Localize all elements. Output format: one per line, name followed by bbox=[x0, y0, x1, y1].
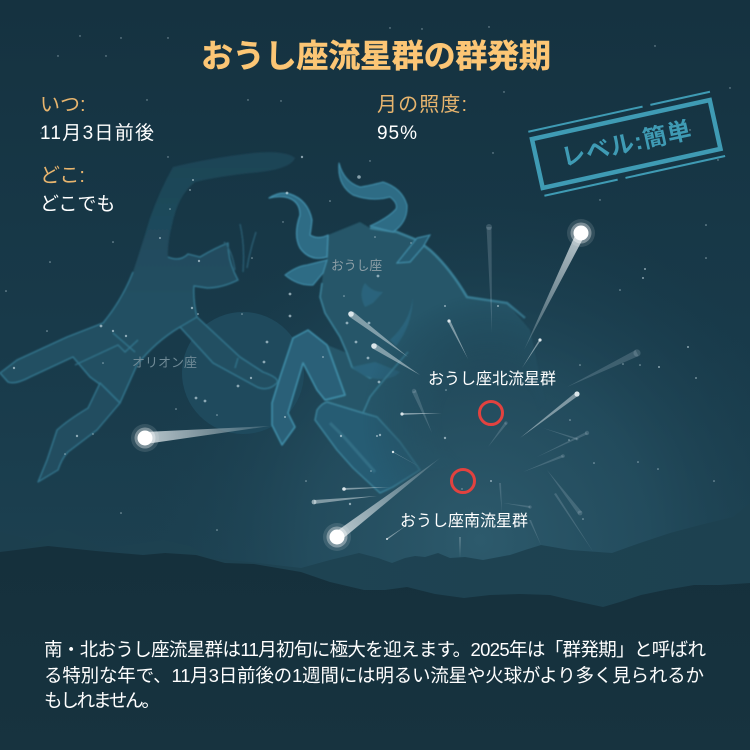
radiant marker: north bbox=[480, 402, 502, 424]
big meteor: upper right bbox=[524, 219, 595, 350]
info block: where bbox=[40, 164, 115, 215]
info block: where: どこ: bbox=[40, 164, 85, 187]
mountains: near ridge bbox=[0, 546, 750, 750]
bull body bbox=[320, 222, 532, 430]
info block: where: どこでも bbox=[40, 193, 115, 215]
title: おうし座流星群の群発期 bbox=[201, 38, 551, 74]
bull ears bbox=[285, 260, 327, 285]
difficulty stamp: レベル:簡単 bbox=[559, 117, 694, 172]
moon-like disc behind the constellations bbox=[182, 312, 304, 434]
info block: when: 11月3日前後 bbox=[40, 122, 154, 144]
label: Northern Taurids: おうし座北流星群 bbox=[428, 370, 556, 388]
bull right horn bbox=[339, 163, 407, 232]
info block: moon illumination bbox=[377, 93, 467, 144]
bull fore legs bbox=[272, 330, 345, 445]
bull left horn bbox=[269, 193, 328, 258]
difficulty stamp bbox=[528, 92, 725, 196]
background stars bbox=[5, 26, 731, 561]
info block: moon illumination: 月の照度: bbox=[377, 93, 467, 116]
mountains: far ridge bbox=[0, 503, 750, 620]
label: Orion: オリオン座 bbox=[132, 355, 197, 370]
big meteor: bottom bbox=[323, 458, 440, 551]
description text: る特別な年で、11月3日前後の1週間には明るい流星や火球がより多く見られるか bbox=[44, 665, 704, 686]
description text: 南・北おうし座流星群は11月初旬に極大を迎えます。2025年は「群発期」と呼ばれ bbox=[44, 639, 706, 660]
info block: when bbox=[40, 94, 154, 144]
constellation: Orion bbox=[0, 152, 295, 482]
faint meteors bbox=[412, 224, 641, 553]
info block: moon illumination: 95% bbox=[377, 123, 417, 144]
radiant marker: south bbox=[452, 470, 474, 492]
constellation: Taurus bbox=[269, 163, 545, 493]
bull eye and cheek bbox=[362, 283, 413, 346]
bright small meteors bbox=[312, 311, 580, 558]
label: Taurus: おうし座 bbox=[331, 258, 382, 273]
info block: when: いつ: bbox=[40, 94, 86, 116]
label: Southern Taurids: おうし座南流星群 bbox=[400, 512, 528, 530]
description text: もしれません。 bbox=[44, 690, 160, 711]
description text bbox=[44, 639, 706, 711]
big meteor: left bbox=[131, 424, 270, 452]
